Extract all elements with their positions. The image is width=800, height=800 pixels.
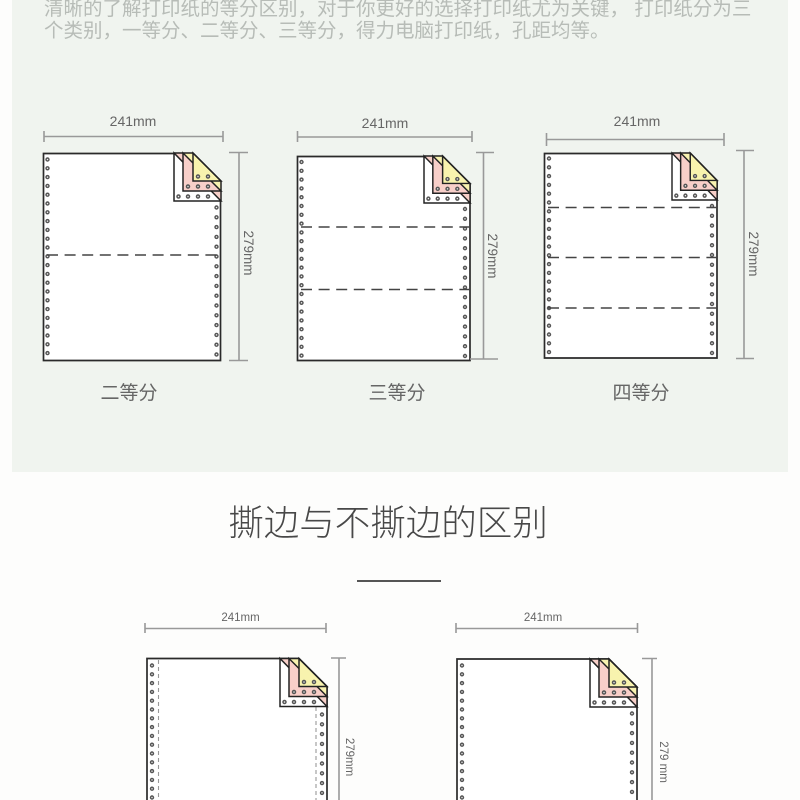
heading rule (357, 580, 441, 582)
corner fold (590, 659, 637, 707)
tear lines (301, 227, 470, 290)
height dimension 5: 279 mm (657, 741, 669, 783)
intro text (44, 0, 751, 42)
paper: two-part (44, 153, 221, 360)
width dimension 4: 241mm (221, 612, 260, 624)
height dimension 2: 279mm (485, 233, 500, 279)
height dimension 4 (331, 658, 355, 800)
corner fold (672, 153, 717, 200)
right holes (630, 714, 634, 800)
tear lines (548, 208, 717, 308)
corner fold (174, 153, 221, 201)
height dimension 3 (736, 150, 761, 358)
height dimension 3: 279mm (746, 231, 761, 277)
left holes (299, 162, 304, 356)
width dimension 3 (546, 113, 724, 146)
left holes (45, 160, 50, 356)
tear line (47, 254, 221, 256)
paper: four-part (544, 153, 717, 358)
heading: tear edge comparison: 撕边与不撕边的区别 (228, 503, 548, 543)
paper: with tear edges (147, 658, 327, 800)
right holes (214, 208, 219, 356)
height dimension 1: 279mm (241, 230, 256, 276)
right holes (710, 206, 714, 354)
tear edge lines (158, 660, 316, 800)
width dimension 2: 241mm (362, 115, 408, 131)
label: 三等分: 三等分 (368, 382, 426, 404)
right holes (320, 714, 324, 800)
height dimension 1 (229, 152, 256, 360)
paper: without tear edges (457, 659, 637, 800)
width dimension 1 (44, 113, 223, 142)
width dimension 3: 241mm (614, 113, 660, 129)
height dimension 2 (470, 152, 500, 359)
left holes (547, 158, 551, 354)
height dimension 4: 279mm (343, 738, 355, 776)
left holes (150, 666, 154, 800)
background panel (12, 0, 788, 472)
label: 四等分: 四等分 (612, 382, 670, 404)
width dimension 5: 241mm (524, 612, 562, 624)
height dimension 5 (642, 658, 669, 800)
width dimension 2 (298, 115, 472, 142)
label: 二等分: 二等分 (100, 382, 158, 404)
width dimension 1: 241mm (110, 113, 156, 129)
right holes (463, 209, 467, 356)
paper: three-part (298, 156, 470, 360)
corner fold (280, 658, 327, 706)
left holes (460, 666, 464, 800)
intro text: 个类别，一等分、二等分、三等分，得力电脑打印纸，孔距均等。 (44, 20, 610, 42)
width dimension 5 (456, 612, 638, 633)
corner fold (424, 156, 470, 203)
width dimension 4 (145, 612, 326, 633)
